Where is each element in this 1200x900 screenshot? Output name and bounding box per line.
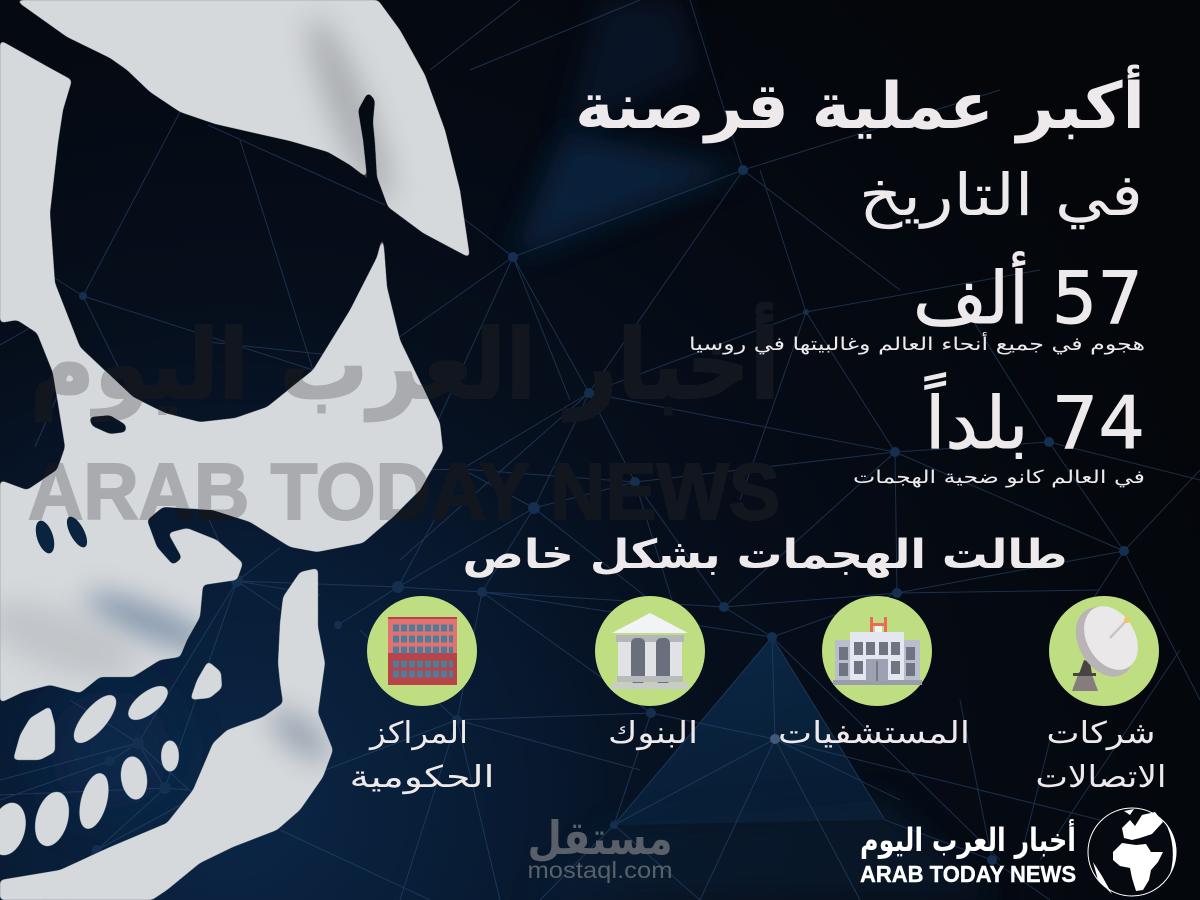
skull watermark: [28, 362, 428, 521]
watermark on dark background: [28, 303, 780, 536]
category: government centres: [350, 596, 494, 795]
category: hospitals: المستشفيات: [778, 716, 970, 751]
category: banks: البنوك: [608, 716, 698, 751]
section heading: طالت الهجمات بشكل خاص: [462, 532, 1068, 578]
category: telecom companies: شركات: [1046, 716, 1156, 751]
category: hospitals: [778, 596, 970, 751]
logo: Arab Today News: ARAB TODAY NEWS: [860, 861, 1076, 887]
icon: globe: [1088, 808, 1176, 896]
category: telecom companies: [1036, 596, 1166, 795]
skull nostril marks: [32, 514, 91, 556]
category: telecom companies: الاتصالات: [1036, 760, 1166, 795]
title: [575, 64, 1145, 230]
category: banks: [595, 596, 705, 751]
mostaql watermark logo: مستقل: [528, 811, 672, 865]
skull shading: [0, 10, 406, 769]
icon: hospital building: [833, 617, 922, 685]
category: government centres: الحكومية: [350, 760, 494, 795]
icon: satellite dish: [1064, 597, 1149, 691]
skull watermark: ARAB TODAY NEWS: [28, 447, 780, 536]
stat: 74 countries: [853, 372, 1145, 488]
stat: 74 countries: في العالم كانو ضحية الهجمات: [853, 467, 1145, 488]
logo: Arab Today News: أخبار العرب اليوم: [860, 819, 1076, 859]
stat: 57 thousand attacks: هجوم في جميع أنحاء العالم وغالبيتها في روسيا: [689, 332, 1145, 355]
mostaql watermark logo: mostaql.com: [528, 857, 672, 883]
category: government centres: المراكز: [368, 716, 468, 751]
skull teeth: [0, 661, 222, 859]
stat: 57 thousand attacks: [689, 251, 1145, 355]
icon: office tower: [388, 617, 457, 685]
network nodes: [79, 165, 1129, 865]
skull illustration: [0, 0, 470, 900]
icon: bank columns: [612, 613, 688, 689]
stat: 74 countries: 74 بلداً: [924, 372, 1145, 465]
title: أكبر عملية قرصنة: [575, 64, 1145, 144]
stat: 57 thousand attacks: 57 ألف: [913, 251, 1143, 340]
skull watermark: أخبار العرب اليوم: [30, 303, 780, 422]
watermark on dark background: أخبار العرب اليوم: [30, 303, 780, 422]
mostaql watermark logo: [528, 811, 672, 883]
logo: Arab Today News: [860, 808, 1176, 896]
watermark on dark background: ARAB TODAY NEWS: [28, 447, 780, 536]
title: في التاريخ: [859, 161, 1143, 230]
